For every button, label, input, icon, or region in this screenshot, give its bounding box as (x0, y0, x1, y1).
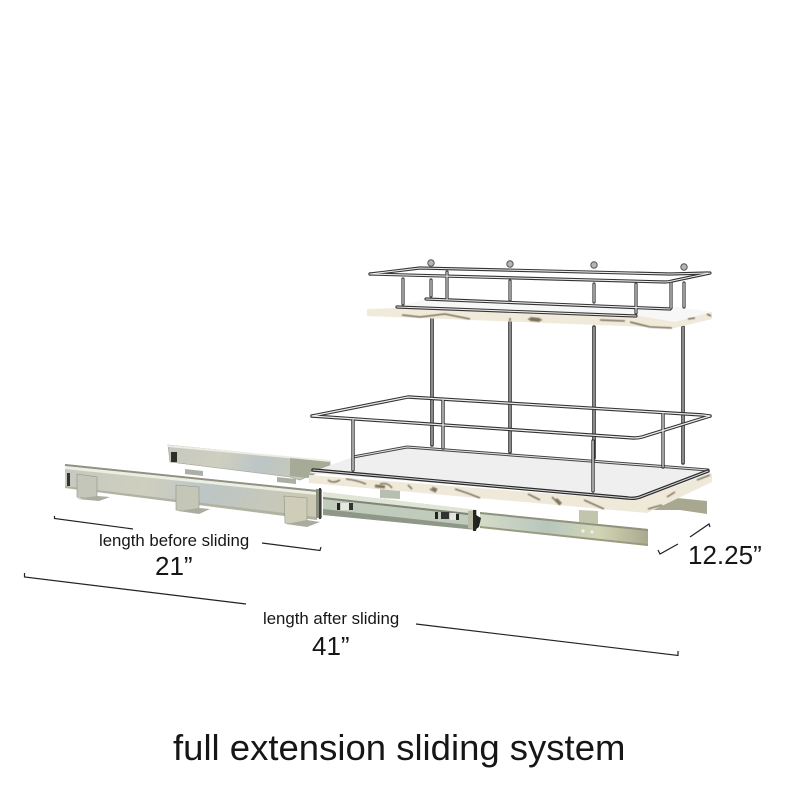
lower guard rail (312, 397, 710, 491)
top guard rail (370, 260, 710, 316)
top shelf board (367, 299, 712, 328)
marble veins (402, 314, 711, 328)
extended slide: ball-bearing carriage (323, 492, 481, 531)
dimension: shelf depth (658, 524, 762, 570)
posts (432, 318, 683, 463)
dimension: length before sliding: length before sliding (99, 531, 249, 550)
front slide rail with mounting feet (65, 464, 322, 527)
dimension: length before sliding: 21” (155, 551, 193, 581)
title: full extension sliding system (173, 727, 625, 768)
dimension: length after sliding (24, 573, 678, 661)
back slide rail (168, 445, 330, 484)
lower shelf trim (313, 447, 708, 498)
mounting foot 2 (176, 485, 210, 514)
mounting foot 1 (77, 474, 110, 501)
rear right rail and tray supports (380, 488, 707, 524)
lower shelf board (309, 447, 712, 513)
dimension: length after sliding: length after sliding (263, 609, 399, 628)
extended slide: narrow inner rail (480, 512, 648, 546)
post finials (428, 260, 687, 270)
marble veins (328, 475, 710, 509)
dimension: shelf depth: 12.25” (688, 540, 762, 570)
dimension: length before sliding (54, 516, 321, 581)
dimension: length after sliding: 41” (312, 631, 350, 661)
mounting foot 3 (284, 496, 320, 527)
